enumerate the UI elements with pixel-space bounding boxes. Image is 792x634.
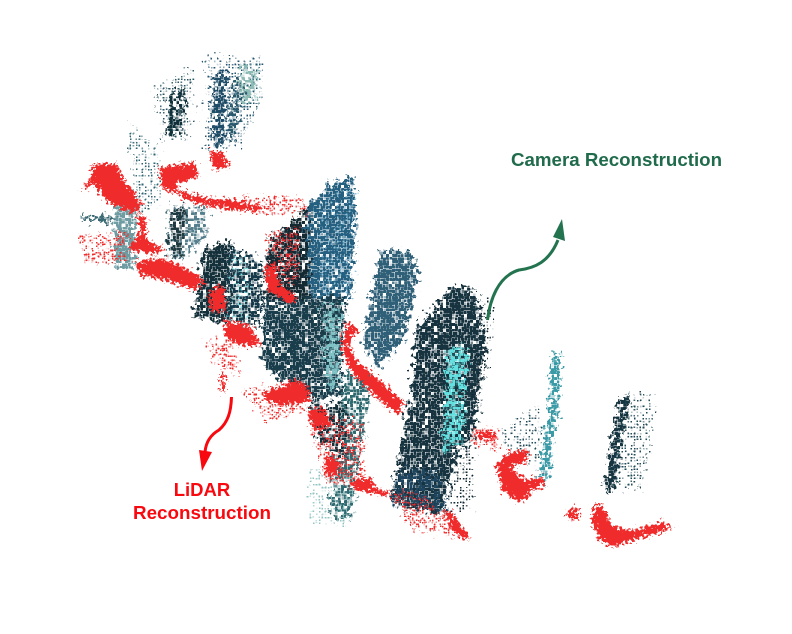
lidar: right band under blue tower — [342, 322, 404, 414]
building: large tower upper blue — [306, 178, 356, 300]
building: large tower upper dark — [264, 208, 322, 300]
highlight: tallest tower cyan strip — [442, 345, 468, 455]
lidar speckle: over large tower — [266, 228, 300, 285]
building: tallest tower base — [392, 470, 445, 512]
lidar: curve at tower base — [264, 264, 298, 304]
building: top pair core — [212, 64, 258, 146]
building: left grey tower — [84, 205, 136, 268]
lidar: mid blob — [265, 380, 310, 406]
building: large tower highlights — [318, 185, 355, 300]
LiDAR speckled fragments — [78, 195, 500, 540]
lidar: dropping strip — [221, 372, 225, 392]
lidar: far left wall — [82, 163, 142, 214]
lidar: small right patch — [476, 433, 496, 439]
lidar: small patch — [567, 507, 578, 520]
lidar speckle: drop region — [205, 340, 240, 375]
building: lower left pale base — [310, 470, 355, 525]
lidar: lower cluster second blob — [326, 456, 340, 476]
label: Camera Reconstruction: Camera Reconstruction — [511, 149, 722, 170]
lidar: foot band — [352, 478, 390, 496]
LiDAR reconstruction point cloud — [82, 150, 672, 547]
building: small grey block — [168, 206, 208, 258]
lidar: lower cluster blobs — [308, 408, 330, 430]
building: top left sliver core — [166, 88, 186, 136]
building: left sparse tower — [128, 125, 160, 212]
lidar: curved arc right — [592, 505, 672, 547]
lidar: upper central blob — [160, 163, 198, 195]
lidar: block in dark building — [210, 286, 226, 312]
building: lower left dark cluster — [310, 400, 345, 460]
lidar speckle: upper band right — [240, 195, 310, 215]
building: thin cyan tower — [538, 352, 561, 482]
arrow: camera — [488, 219, 565, 320]
label: LiDAR Reconstruction: LiDAR — [174, 479, 230, 500]
arrow: LiDAR — [199, 397, 232, 471]
lidar: left cluster — [128, 212, 166, 254]
lidar: central lower band — [224, 320, 260, 346]
camera reconstruction point cloud — [84, 56, 655, 525]
label: LiDAR Reconstruction — [133, 479, 271, 523]
building: middle blue tower — [362, 250, 418, 366]
building: central dark block — [194, 240, 232, 322]
building: central teal block — [226, 244, 262, 326]
highlight: central cyan strip — [228, 250, 250, 320]
lidar: upper band — [178, 190, 262, 211]
lidar: curved arc middle — [496, 450, 530, 502]
lidar: mid band — [135, 258, 205, 290]
building: large tower lower — [262, 296, 345, 400]
lidar: top small blob — [210, 150, 230, 170]
building: top left sliver — [156, 66, 194, 140]
lidar speckle: base of tallest — [385, 490, 470, 540]
lidar speckle: left side — [78, 232, 125, 262]
building: right tower sparse side — [610, 395, 655, 490]
points: scattered noise near tower — [440, 300, 540, 520]
building: right tower — [604, 396, 630, 492]
lidar: bottom diagonal — [444, 510, 470, 539]
building: top pair halo — [206, 56, 262, 150]
highlight: large tower cyan strip — [322, 305, 340, 390]
building: tallest tower dark — [392, 285, 486, 515]
label: LiDAR Reconstruction: Reconstruction — [133, 502, 271, 523]
lidar speckle: lower cluster — [310, 415, 365, 490]
lidar speckle: mid tower — [240, 385, 305, 420]
building: lower left teal tower — [330, 372, 372, 518]
lidar speckle: right of tallest — [472, 428, 500, 450]
